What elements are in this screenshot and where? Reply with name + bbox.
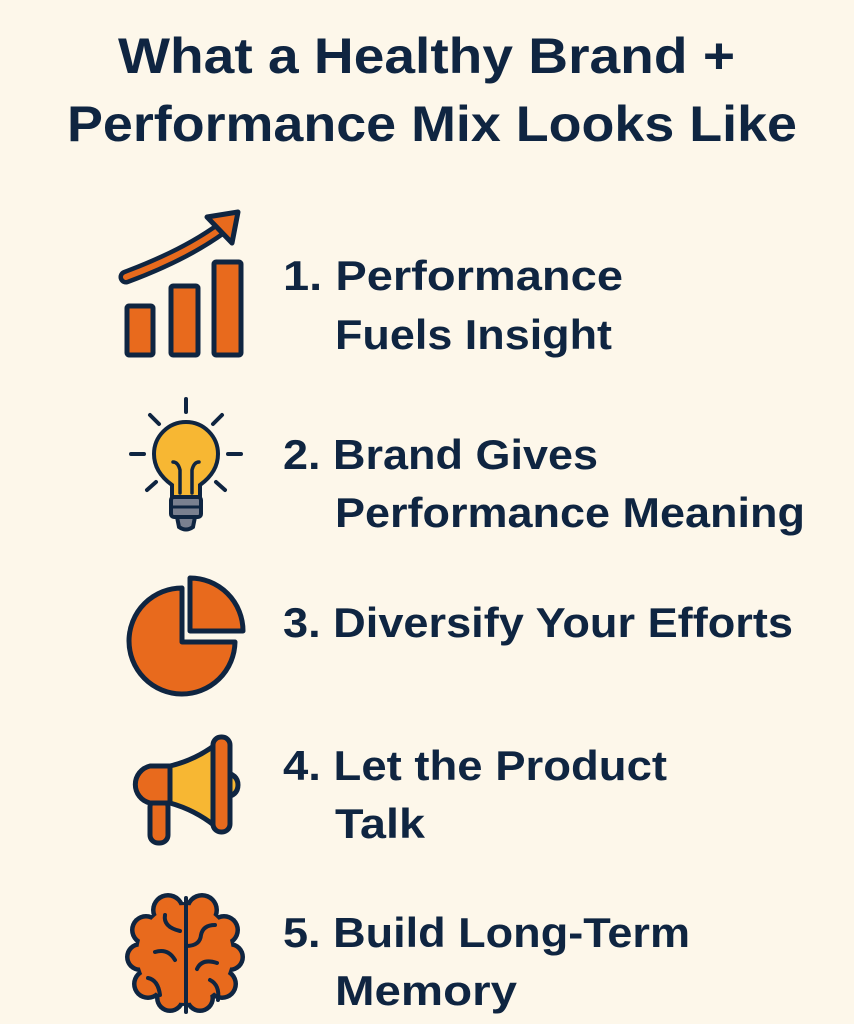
icon: pie chart xyxy=(129,578,243,694)
item 1 text: Fuels Insight xyxy=(335,311,612,358)
item 3 text: 3. Diversify Your Efforts xyxy=(283,599,793,646)
item 2 text xyxy=(283,431,805,536)
icon: light bulb xyxy=(131,399,241,530)
icon: brain xyxy=(125,893,245,1013)
item 5 text: Memory xyxy=(335,967,518,1014)
title: Performance Mix Looks Like xyxy=(67,96,797,152)
item 4 text: 4. Let the Product xyxy=(283,742,667,789)
item 5 text: 5. Build Long-Term xyxy=(283,909,690,956)
item 2 text: Performance Meaning xyxy=(335,489,805,536)
item 2 text: 2. Brand Gives xyxy=(283,431,598,478)
item 5 text xyxy=(283,909,690,1014)
icon: megaphone xyxy=(135,737,238,843)
icon: bar chart with arrow xyxy=(126,212,241,355)
title: What a Healthy Brand + xyxy=(118,28,735,84)
item 1 text: 1. Performance xyxy=(283,252,623,299)
item 4 text xyxy=(283,742,667,847)
title xyxy=(67,28,797,152)
item 4 text: Talk xyxy=(335,800,426,847)
item 1 text xyxy=(283,252,623,358)
